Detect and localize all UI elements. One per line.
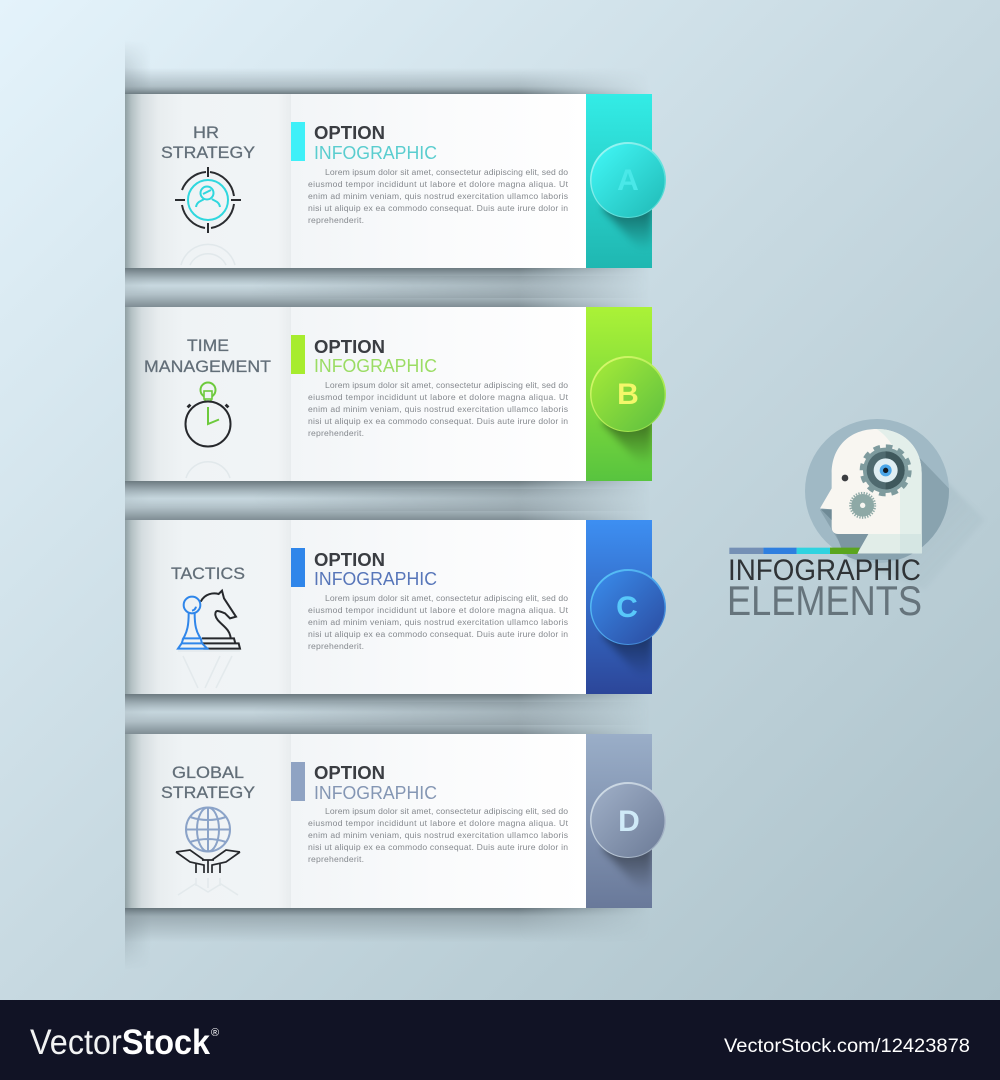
body text C: eiusmod tempor incididunt ut labore et dolore magna aliqua. Ut	[308, 605, 569, 615]
shadow inside circle	[820, 458, 949, 560]
logo text	[727, 554, 922, 624]
body text D: Lorem ipsum dolor sit amet, consectetur adipiscing elit, sed do	[325, 806, 568, 816]
footer logo: VectorStock	[30, 1023, 210, 1062]
body text A: eiusmod tempor incididunt ut labore et dolore magna aliqua. Ut	[308, 179, 569, 189]
text panel A	[291, 94, 586, 268]
body text B: reprehenderit.	[308, 428, 364, 438]
left section C	[125, 520, 291, 694]
body text C: reprehenderit.	[308, 641, 364, 651]
heading: global strategy	[161, 763, 255, 802]
body text A: nisi ut aliquip ex ea commodo consequat. Duis aute irure dolor in	[308, 203, 568, 213]
icon: chess pieces	[178, 591, 240, 649]
body text C: nisi ut aliquip ex ea commodo consequat. Duis aute irure dolor in	[308, 629, 568, 639]
icon: stopwatch	[186, 382, 230, 446]
badge C	[590, 569, 666, 677]
faint long shadow	[850, 450, 985, 590]
accent bar B	[291, 335, 305, 374]
chin shadow	[821, 509, 832, 520]
text panel B	[291, 307, 586, 481]
neck shadow	[836, 534, 868, 553]
heading: time management: TIME	[187, 336, 229, 355]
body text A: reprehenderit.	[308, 215, 364, 225]
small gear	[850, 493, 875, 518]
body text D: eiusmod tempor incididunt ut labore et dolore magna aliqua. Ut	[308, 818, 569, 828]
eye dot	[842, 475, 848, 481]
panel: option B	[125, 307, 666, 481]
heading: time management	[144, 336, 271, 376]
shadow above first card	[125, 71, 640, 94]
accent bar A	[291, 122, 305, 161]
body text D: reprehenderit.	[308, 854, 364, 864]
accent bar C	[291, 548, 305, 587]
footer bar	[0, 1000, 1000, 1080]
left section D	[125, 734, 291, 908]
title D	[314, 763, 437, 803]
badge A: A	[617, 164, 639, 197]
badge D	[590, 782, 666, 890]
colour strip	[729, 548, 860, 554]
large gear	[862, 446, 910, 494]
shadow gap 2	[125, 481, 650, 520]
head silhouette	[820, 429, 922, 553]
badge C: C	[616, 591, 638, 624]
panel: option C	[125, 520, 666, 694]
logo text: INFOGRAPHIC	[728, 554, 921, 587]
badge B	[590, 356, 666, 464]
body text A	[308, 167, 569, 225]
colour band B	[586, 307, 652, 481]
body text C: enim ad minim veniam, quis nostrud exercitation ullamco laboris	[308, 617, 568, 627]
body text B: eiusmod tempor incididunt ut labore et dolore magna aliqua. Ut	[308, 392, 569, 402]
badge A	[590, 142, 666, 250]
panel: option D	[125, 734, 666, 908]
body text D	[308, 806, 569, 864]
colour band A	[586, 94, 652, 268]
icon: HR target	[175, 167, 241, 233]
body text A: enim ad minim veniam, quis nostrud exercitation ullamco laboris	[308, 191, 568, 201]
title D: OPTION	[314, 763, 385, 783]
colour band D	[586, 734, 652, 908]
logo text: ELEMENTS	[727, 577, 922, 624]
title A: INFOGRAPHIC	[314, 143, 437, 163]
body text B: enim ad minim veniam, quis nostrud exercitation ullamco laboris	[308, 404, 568, 414]
body text D: nisi ut aliquip ex ea commodo consequat. Duis aute irure dolor in	[308, 842, 568, 852]
title B	[314, 337, 437, 376]
icon reflection B	[186, 462, 230, 478]
icon reflection A	[181, 244, 235, 265]
body text D: enim ad minim veniam, quis nostrud exercitation ullamco laboris	[308, 830, 568, 840]
title C: OPTION	[314, 550, 385, 570]
body text C: Lorem ipsum dolor sit amet, consectetur adipiscing elit, sed do	[325, 593, 568, 603]
colour band C	[586, 520, 652, 694]
left edge shadow	[125, 48, 144, 959]
accent bar D	[291, 762, 305, 801]
shadow gap 3	[125, 694, 650, 734]
body text B: Lorem ipsum dolor sit amet, consectetur adipiscing elit, sed do	[325, 380, 568, 390]
shadow below last card	[125, 908, 638, 937]
title C: INFOGRAPHIC	[314, 569, 437, 589]
text panel C	[291, 520, 586, 694]
heading: global strategy: GLOBAL	[172, 763, 244, 782]
body text A: Lorem ipsum dolor sit amet, consectetur adipiscing elit, sed do	[325, 167, 568, 177]
heading: HR strategy: HR	[193, 123, 219, 142]
icon reflection C	[178, 651, 240, 688]
footer url: VectorStock.com/12423878	[724, 1036, 970, 1057]
registered mark: ®	[211, 1027, 219, 1039]
body text B: nisi ut aliquip ex ea commodo consequat. Duis aute irure dolor in	[308, 416, 568, 426]
heading: time management: MANAGEMENT	[144, 357, 271, 376]
title B: OPTION	[314, 337, 385, 357]
heading: HR strategy	[161, 123, 255, 162]
neck shade	[857, 534, 922, 553]
left section B	[125, 307, 291, 481]
icon reflection D	[178, 878, 238, 895]
head shade	[877, 429, 922, 553]
title D: INFOGRAPHIC	[314, 783, 437, 803]
title C	[314, 550, 437, 589]
left section A	[125, 94, 291, 268]
badge B: B	[617, 378, 639, 411]
logo: head icon	[729, 419, 967, 578]
icon: globe in hands	[176, 808, 240, 873]
heading: tactics: TACTICS	[171, 564, 245, 583]
panel: option A	[125, 94, 666, 268]
badge D: D	[618, 805, 640, 838]
circle backdrop	[805, 419, 949, 563]
heading: global strategy: STRATEGY	[161, 783, 255, 802]
heading: HR strategy: STRATEGY	[161, 143, 255, 162]
title A: OPTION	[314, 123, 385, 143]
text panel D	[291, 734, 586, 908]
title B: INFOGRAPHIC	[314, 356, 437, 376]
shadow gap 1	[125, 268, 650, 307]
title A	[314, 123, 437, 163]
body text C	[308, 593, 569, 651]
body text B	[308, 380, 569, 438]
